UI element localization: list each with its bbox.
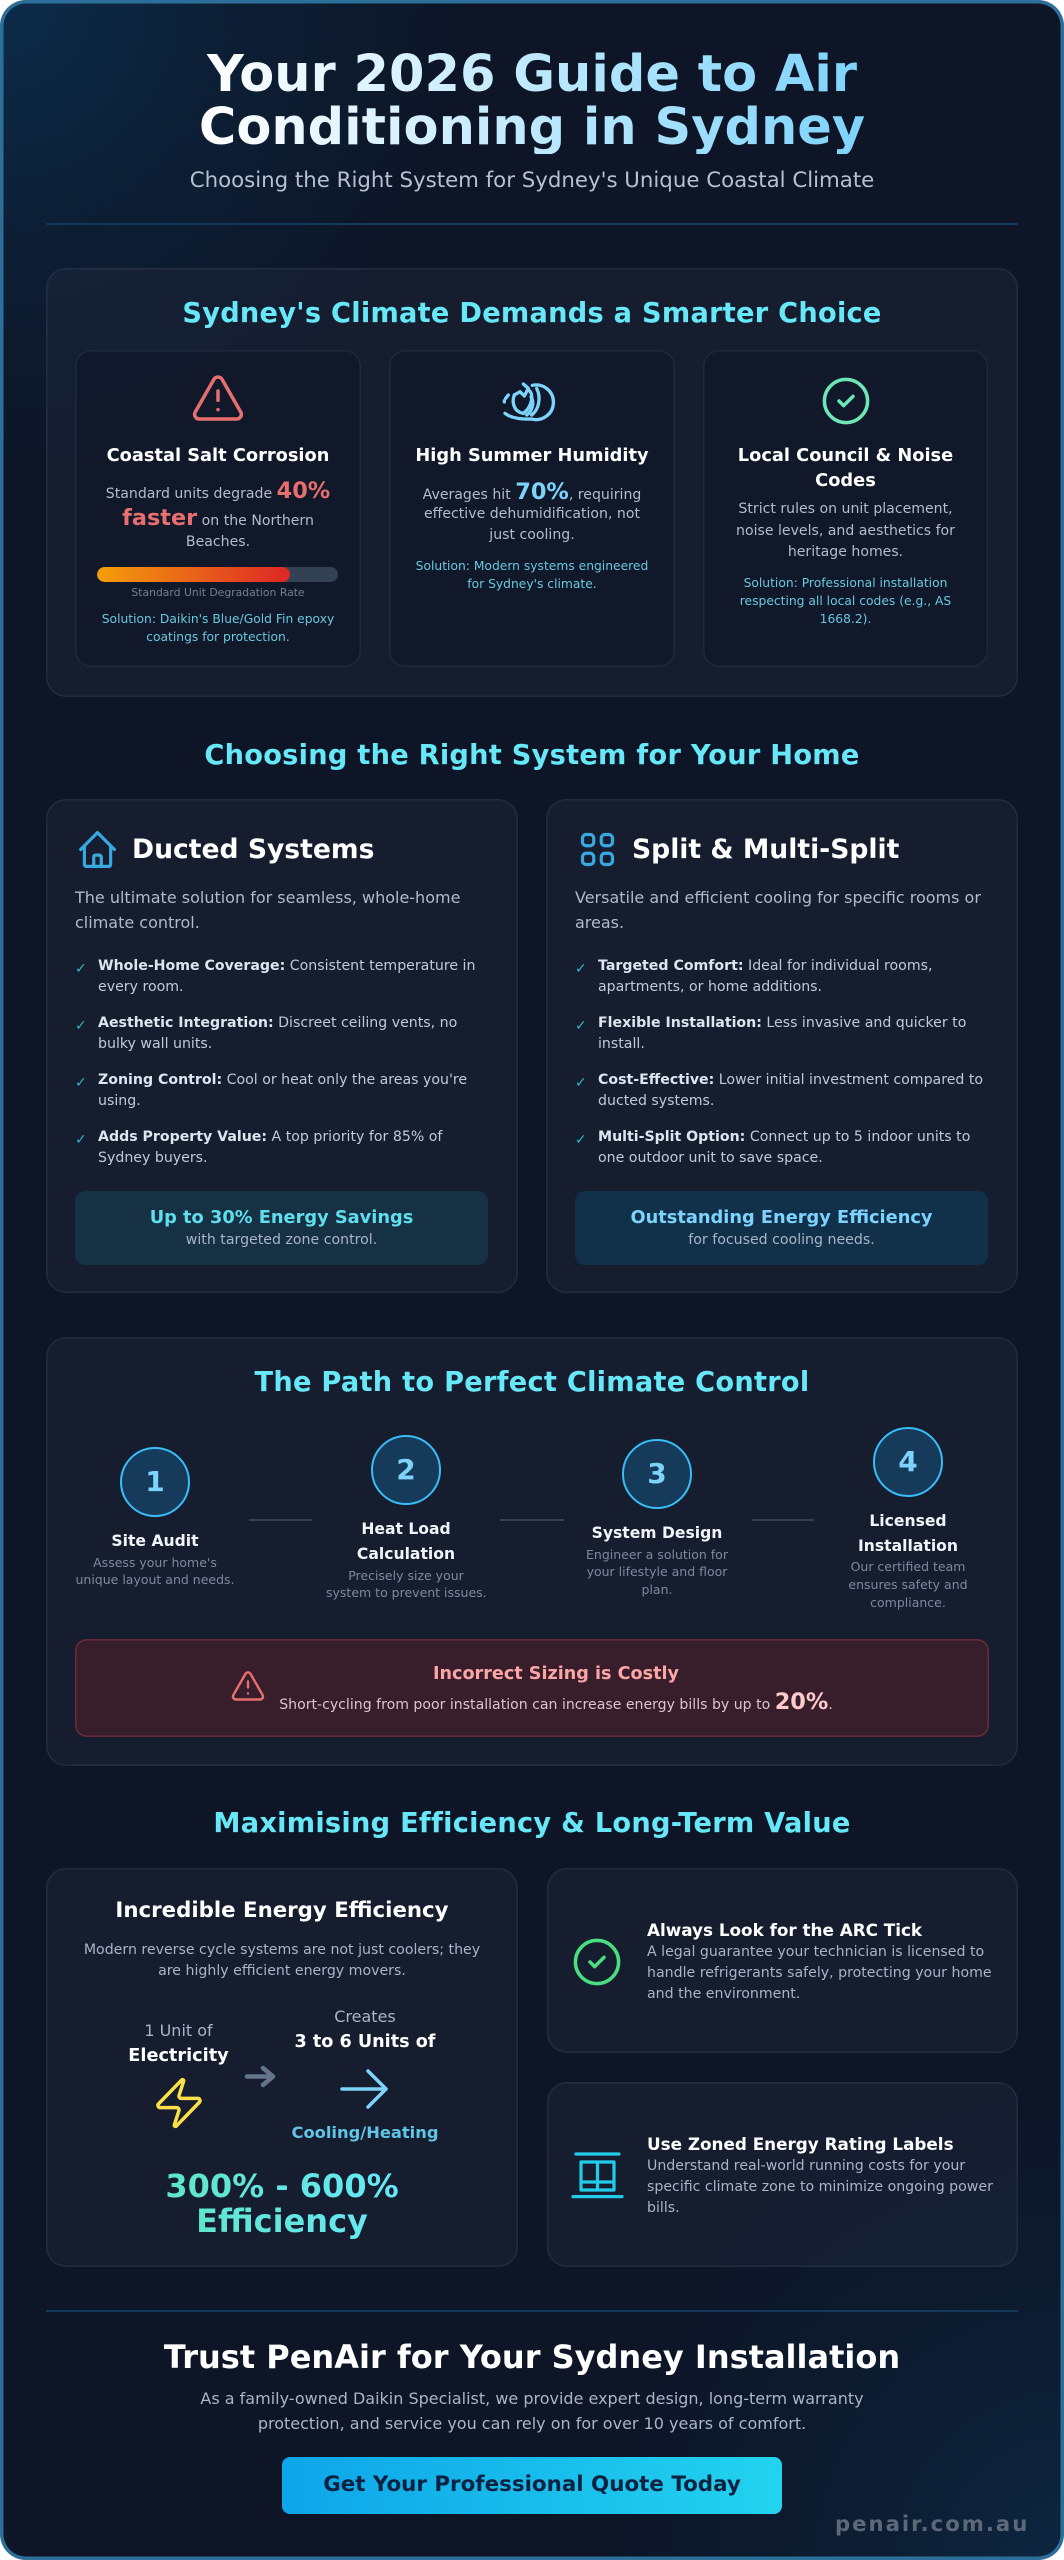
title — [199, 44, 865, 156]
panel: ducted systems — [46, 799, 518, 1293]
output label: Creates — [334, 2007, 396, 2026]
solution — [102, 612, 334, 644]
heading: process: The Path to Perfect Climate Control — [255, 1366, 809, 1398]
efficiency stat — [165, 2166, 399, 2240]
panel: energy efficiency — [46, 1868, 518, 2267]
card body: just cooling. — [489, 527, 575, 543]
panel title: Ducted Systems — [132, 834, 374, 865]
description: Versatile and efficient cooling for specific rooms or — [575, 888, 981, 907]
tip text: specific climate zone to minimize ongoing power — [647, 2179, 993, 2195]
benefit: Aesthetic Integration: Discreet ceiling vents, no — [98, 1015, 457, 1031]
panel: energy labels — [547, 2082, 1018, 2267]
card body: Strict rules on unit placement, — [738, 501, 953, 517]
benefit — [575, 1129, 970, 1166]
step 1: Site Audit — [111, 1532, 199, 1550]
card title — [738, 445, 953, 491]
step 4: Our certified team — [851, 1559, 965, 1574]
solution: 1668.2). — [820, 612, 871, 626]
benefit: using. — [98, 1093, 141, 1109]
solution: coatings for protection. — [146, 630, 290, 644]
benefit: install. — [598, 1036, 645, 1052]
tip text — [647, 1942, 992, 2006]
solution: Solution: Modern systems engineered — [416, 559, 648, 573]
efficiency stat: 300% - 600% — [165, 2166, 399, 2204]
alert title: Incorrect Sizing is Costly — [433, 1664, 679, 1684]
card body: Beaches. — [186, 534, 250, 550]
step 4: 4 — [898, 1445, 918, 1478]
benefit: Flexible Installation: Less invasive and quicker to — [598, 1015, 966, 1031]
footer text: protection, and service you can rely on for over 10 years of comfort. — [258, 2414, 806, 2433]
icon: humidity — [502, 382, 556, 422]
benefit — [575, 958, 932, 995]
benefit — [575, 1015, 966, 1052]
step 4: ensures safety and — [848, 1577, 968, 1592]
alert callout — [75, 1639, 989, 1737]
tip title: Use Zoned Energy Rating Labels — [647, 2134, 954, 2154]
tip title: Always Look for the ARC Tick — [647, 1920, 922, 1940]
title: Conditioning in Sydney — [199, 98, 865, 156]
tip text: bills. — [647, 2200, 680, 2216]
footer text: As a family-owned Daikin Specialist, we provide expert design, long-term warranty — [200, 2389, 864, 2408]
benefit: bulky wall units. — [98, 1036, 212, 1052]
stat callout — [575, 1191, 988, 1265]
panel: process — [46, 1337, 1018, 1766]
card body: heritage homes. — [788, 544, 903, 560]
efficiency stat: Efficiency — [196, 2202, 368, 2240]
card: humidity — [389, 350, 675, 667]
benefit: Cost-Effective: Lower initial investment compared to — [598, 1072, 983, 1088]
stat callout: with targeted zone control. — [186, 1232, 377, 1248]
step 1 — [75, 1447, 235, 1587]
icon: grid — [580, 832, 614, 866]
step 2: 2 — [396, 1453, 416, 1486]
benefit — [575, 1072, 983, 1109]
benefit: Zoning Control: Cool or heat only the areas you're — [98, 1072, 467, 1088]
benefit: one outdoor unit to save space. — [598, 1150, 823, 1166]
panel title: Split & Multi-Split — [632, 834, 899, 865]
benefit: apartments, or home additions. — [598, 979, 822, 995]
benefit: Sydney buyers. — [98, 1150, 208, 1166]
alert text: Short-cycling from poor installation can increase energy bills by up to 20%. — [279, 1689, 833, 1715]
website watermark: penair.com.au — [835, 2511, 1029, 2536]
icon: arrow right — [340, 2069, 388, 2109]
icon: house — [79, 830, 116, 868]
benefit: ✓ — [75, 961, 87, 977]
step 2: Precisely size your — [348, 1568, 464, 1582]
button: Get Your Professional Quote Today — [323, 2472, 741, 2497]
step 1: Assess your home's — [93, 1554, 217, 1570]
card body: noise levels, and aesthetics for — [736, 523, 955, 539]
step 3: System Design — [592, 1524, 722, 1542]
step 3 — [586, 1439, 728, 1597]
benefit — [75, 1015, 457, 1052]
card body — [422, 478, 641, 543]
output label — [295, 2007, 436, 2052]
panel: ARC tick — [547, 1868, 1018, 2053]
footer text — [46, 2386, 1018, 2437]
heading: efficiency: Maximising Efficiency & Long-Term Value — [213, 1808, 851, 1839]
step 3: 3 — [647, 1457, 667, 1490]
benefit — [75, 1072, 467, 1109]
description: climate control. — [75, 913, 200, 932]
benefit: ✓ — [575, 1075, 587, 1091]
stat callout: for focused cooling needs. — [688, 1232, 875, 1248]
icon: check circle — [822, 378, 870, 424]
panel title: Incredible Energy Efficiency — [115, 1898, 449, 1923]
description: Modern reverse cycle systems are not just coolers; they — [84, 1942, 480, 1958]
footer — [46, 2330, 1018, 2520]
stat callout — [75, 1191, 488, 1265]
step 2: Heat Load — [361, 1520, 451, 1538]
icon: rating label — [571, 2148, 623, 2200]
icon: warning triangle — [192, 375, 244, 421]
solution: Solution: Professional installation — [744, 576, 947, 590]
output column — [292, 2007, 438, 2142]
input label: 1 Unit of — [144, 2021, 213, 2040]
solution — [740, 576, 951, 626]
step 3: Engineer a solution for — [586, 1546, 728, 1562]
tip text: and the environment. — [647, 1986, 800, 2002]
benefit: ✓ — [575, 961, 587, 977]
description: areas. — [575, 913, 624, 932]
footer title: Trust PenAir for Your Sydney Installation — [164, 2338, 900, 2376]
icon: green check — [574, 1938, 620, 1986]
benefit: ducted systems. — [598, 1093, 714, 1109]
button — [282, 2457, 782, 2514]
card title: Coastal Salt Corrosion — [107, 445, 329, 466]
benefit: Multi-Split Option: Connect up to 5 indoor units to — [598, 1129, 970, 1145]
step 2 — [326, 1435, 487, 1600]
degradation bar — [97, 567, 338, 582]
heading: climate: Sydney's Climate Demands a Smarter Choice — [182, 298, 882, 328]
card title: High Summer Humidity — [415, 445, 649, 466]
step 3: plan. — [642, 1582, 672, 1597]
step 1: 1 — [145, 1465, 165, 1498]
tip text: Understand real-world running costs for your — [647, 2158, 965, 2174]
icon: lightning — [156, 2078, 202, 2128]
step 3: your lifestyle and floor — [587, 1564, 727, 1579]
benefit — [75, 958, 475, 995]
icon: warning — [232, 1671, 264, 1701]
input column — [128, 2021, 229, 2128]
benefit: ✓ — [75, 1075, 87, 1091]
card body: faster on the Northern — [122, 504, 314, 530]
panel: climate — [46, 268, 1018, 697]
tip text: handle refrigerants safely, protecting your home — [647, 1965, 992, 1981]
description — [84, 1942, 480, 1979]
benefit: ✓ — [75, 1132, 87, 1148]
card: council codes — [703, 350, 988, 667]
benefit: Adds Property Value: A top priority for 85% of — [98, 1129, 442, 1145]
solution: respecting all local codes (e.g., AS — [740, 594, 951, 608]
title: Your 2026 Guide to Air — [207, 44, 857, 104]
description — [575, 888, 981, 932]
benefit: every room. — [98, 979, 184, 995]
output label: 3 to 6 Units of — [295, 2032, 435, 2052]
step 4: Licensed — [869, 1512, 947, 1530]
benefit — [75, 1129, 443, 1166]
step 4: Installation — [858, 1537, 958, 1555]
panel: split systems — [546, 799, 1018, 1293]
description — [74, 888, 460, 932]
solution: for Sydney's climate. — [467, 577, 597, 591]
benefit: Whole-Home Coverage: Consistent temperature in — [98, 958, 475, 974]
stat callout: Up to 30% Energy Savings — [150, 1207, 413, 1228]
benefit: ✓ — [575, 1132, 587, 1148]
bar label: Standard Unit Degradation Rate — [131, 586, 305, 599]
tip text: A legal guarantee your technician is licensed to — [647, 1944, 984, 1960]
subtitle: Choosing the Right System for Sydney's Unique Coastal Climate — [190, 168, 874, 193]
card body: Averages hit 70%, requiring — [423, 478, 641, 504]
benefit: ✓ — [575, 1018, 587, 1034]
card: salt corrosion — [75, 350, 361, 667]
step 2: Calculation — [357, 1545, 455, 1563]
card body — [736, 501, 955, 560]
step 4 — [848, 1427, 968, 1610]
heading: system choice: Choosing the Right System for Your Home — [204, 740, 860, 771]
card body: effective dehumidification, not — [424, 506, 640, 522]
card title: Codes — [815, 470, 876, 491]
step 2: system to prevent issues. — [326, 1585, 487, 1600]
output caption: Cooling/Heating — [292, 2123, 438, 2142]
solution: Solution: Daikin's Blue/Gold Fin epoxy — [102, 612, 334, 626]
input label — [128, 2021, 229, 2066]
solution — [416, 559, 648, 591]
header — [190, 44, 874, 193]
benefit: ✓ — [75, 1018, 87, 1034]
card body: Standard units degrade 40% — [106, 478, 330, 504]
step 1: unique layout and needs. — [75, 1572, 235, 1587]
step 4: compliance. — [870, 1595, 946, 1610]
benefit: Targeted Comfort: Ideal for individual rooms, — [598, 958, 932, 974]
arrow — [244, 2066, 276, 2088]
description: are highly efficient energy movers. — [158, 1963, 406, 1979]
stat callout: Outstanding Energy Efficiency — [630, 1207, 933, 1228]
input label: Electricity — [128, 2046, 229, 2066]
description: The ultimate solution for seamless, whole-home — [75, 888, 460, 907]
card title: Local Council & Noise — [738, 445, 953, 466]
tip text — [647, 2156, 993, 2220]
card body — [106, 478, 330, 550]
